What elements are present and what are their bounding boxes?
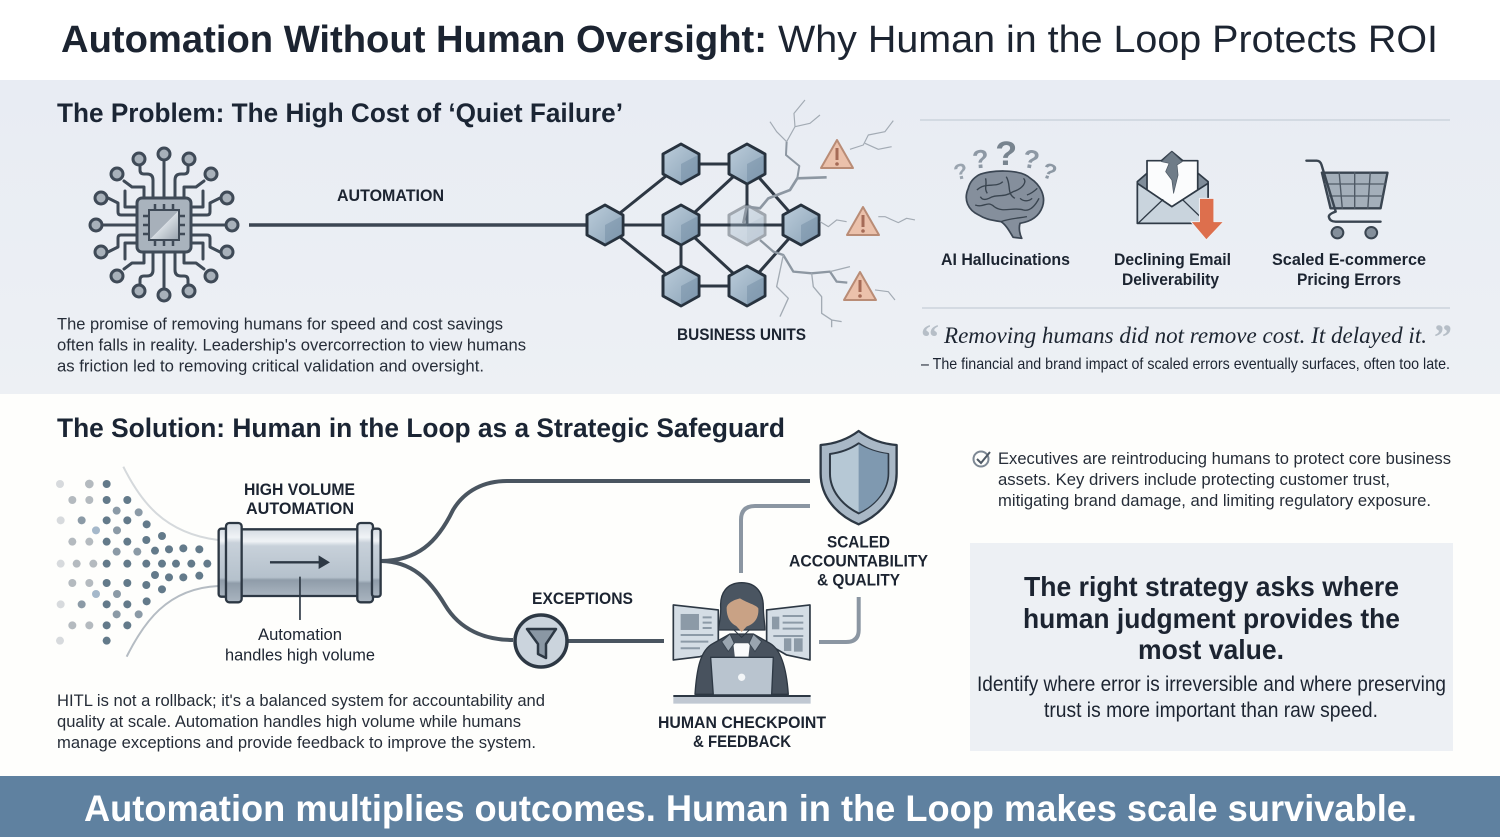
callout body: Identify where error is irreversible and where preserving bbox=[977, 673, 1446, 696]
text: problem description: often falls in reality. Leadership's overcorrection to view humans bbox=[57, 336, 526, 354]
text: problem description bbox=[57, 314, 526, 376]
label: human checkpoint and feedback: HUMAN CHECKPOINT bbox=[658, 713, 827, 732]
quote marks bbox=[921, 317, 1452, 357]
diagram: business unit network bbox=[587, 144, 819, 306]
label: scaled e-commerce pricing errors: Scaled E-commerce bbox=[1272, 250, 1426, 269]
text: problem description: as friction led to removing critical validation and oversight. bbox=[57, 356, 484, 376]
callout headline: The right strategy asks where bbox=[1024, 571, 1399, 602]
icon: brain with question marks: ? bbox=[1020, 143, 1042, 175]
label: scaled accountability and quality: SCALED bbox=[827, 532, 890, 552]
label: high volume automation bbox=[244, 480, 355, 518]
heading: the problem: The Problem: The High Cost of ‘Quiet Failure’ bbox=[57, 98, 623, 128]
panel: the solution bbox=[0, 394, 1500, 776]
icon: brain with question marks: ? bbox=[951, 158, 970, 185]
callout headline: human judgment provides the bbox=[1023, 603, 1400, 634]
text: solution description: manage exceptions and provide feedback to improve the system. bbox=[57, 733, 536, 752]
quote attribution: – The financial and brand impact of scaled errors eventually surfaces, often too late. bbox=[921, 356, 1450, 373]
icon: human reviewer at laptop bbox=[673, 583, 811, 704]
particle funnel bbox=[56, 467, 218, 657]
label: human checkpoint and feedback bbox=[658, 713, 827, 751]
label: automation handles high volume bbox=[225, 625, 375, 664]
label: business units: BUSINESS UNITS bbox=[677, 325, 806, 344]
subtitle: Why Human in the Loop Protects ROI bbox=[778, 19, 1438, 61]
arrow: automation line bbox=[249, 223, 590, 227]
cracks spreading from failed unit bbox=[743, 100, 915, 327]
quote marks: “ bbox=[921, 317, 939, 357]
label: exceptions: EXCEPTIONS bbox=[532, 589, 633, 608]
label: automation: AUTOMATION bbox=[337, 186, 444, 205]
label: scaled accountability and quality: & QUALITY bbox=[817, 570, 901, 590]
icon: brain with question marks: ? bbox=[971, 144, 990, 175]
text: executive drivers: mitigating brand damage, and limiting regulatory exposure. bbox=[998, 491, 1431, 510]
label: scaled accountability and quality: ACCOUNTABILITY bbox=[789, 552, 929, 570]
label: declining email deliverability: Deliverability bbox=[1122, 270, 1219, 289]
icon: funnel bbox=[515, 615, 567, 667]
label: automation handles high volume: handles high volume bbox=[225, 646, 375, 664]
title band bbox=[0, 0, 1500, 80]
icon: brain with question marks: ? bbox=[995, 135, 1017, 173]
icon: check mark bbox=[974, 452, 990, 466]
icon: brain with question marks: ? bbox=[1039, 158, 1060, 185]
label: AI hallucinations: AI Hallucinations bbox=[941, 250, 1070, 269]
icon: shield bbox=[821, 431, 897, 524]
text: solution description bbox=[57, 691, 545, 752]
text: executive drivers bbox=[998, 449, 1451, 510]
label: declining email deliverability: Declining Email bbox=[1114, 250, 1231, 269]
icon: circuit chip bbox=[90, 148, 238, 301]
icon: envelope with down arrow bbox=[1137, 152, 1224, 240]
icon: automation pipe bbox=[219, 523, 381, 620]
label: high volume automation: AUTOMATION bbox=[246, 499, 354, 518]
text: solution description: quality at scale. Automation handles high volume while humans bbox=[57, 712, 521, 731]
label: scaled e-commerce pricing errors: Pricing Errors bbox=[1297, 270, 1401, 289]
connector lines from pipe bbox=[380, 481, 810, 641]
callout body bbox=[977, 673, 1446, 722]
icon: warning triangles bbox=[821, 140, 879, 300]
feedback lines bbox=[741, 506, 859, 642]
label: scaled accountability and quality bbox=[789, 532, 929, 590]
label: high volume automation: HIGH VOLUME bbox=[244, 480, 355, 499]
text: solution description: HITL is not a rollback; it's a balanced system for accountability and bbox=[57, 691, 545, 710]
label: automation handles high volume: Automation bbox=[258, 625, 342, 644]
footer message: Automation multiplies outcomes. Human in the Loop makes scale survivable. bbox=[84, 788, 1417, 829]
callout: right strategy bbox=[970, 543, 1453, 751]
callout headline bbox=[1023, 571, 1400, 665]
quote: Removing humans did not remove cost. It delayed it. bbox=[943, 323, 1427, 348]
label: scaled e-commerce pricing errors bbox=[1272, 250, 1426, 289]
title: Automation Without Human Oversight: bbox=[61, 19, 767, 61]
text: problem description: The promise of removing humans for speed and cost savings bbox=[57, 314, 503, 334]
text: executive drivers: assets. Key drivers include protecting customer trust, bbox=[998, 470, 1390, 489]
icon: brain with question marks bbox=[951, 135, 1060, 238]
callout body: trust is more important than raw speed. bbox=[1044, 699, 1378, 722]
panel: the problem bbox=[0, 80, 1500, 394]
label: declining email deliverability bbox=[1114, 250, 1231, 289]
footer banner bbox=[0, 776, 1500, 837]
icon: shopping cart bbox=[1306, 161, 1387, 238]
label: human checkpoint and feedback: & FEEDBACK bbox=[693, 732, 792, 751]
callout headline: most value. bbox=[1138, 634, 1284, 665]
text: executive drivers: Executives are reintroducing humans to protect core business bbox=[998, 449, 1451, 468]
quote marks: ” bbox=[1434, 317, 1452, 357]
heading: the solution: The Solution: Human in the Loop as a Strategic Safeguard bbox=[57, 413, 785, 443]
